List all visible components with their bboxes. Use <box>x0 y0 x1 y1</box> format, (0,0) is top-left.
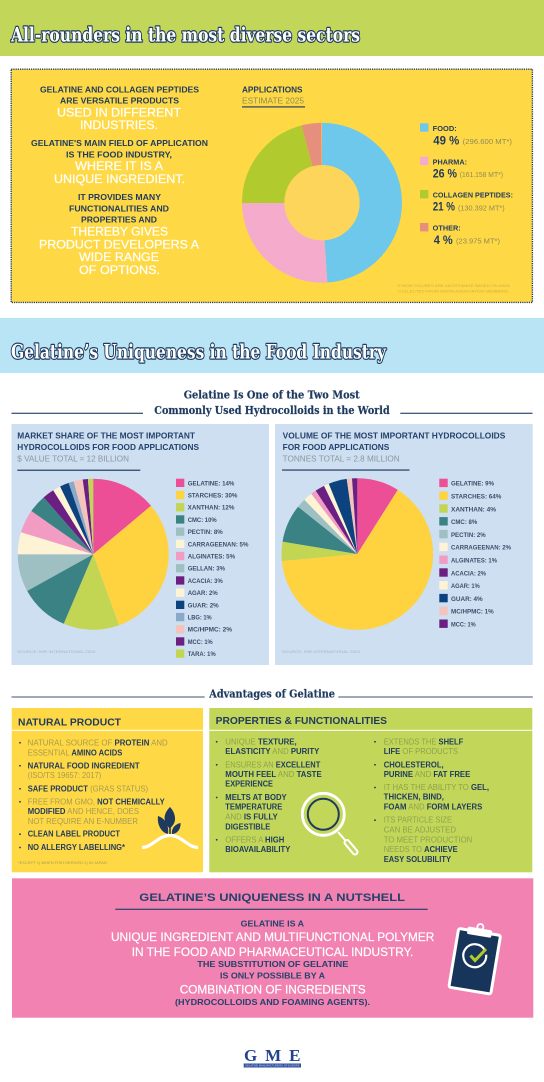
text block: intro copy: THEREBY GIVES <box>71 224 168 238</box>
list: natural product: FREE FROM GMO, NOT CHEMICALLY <box>28 797 165 806</box>
text block: intro copy <box>31 84 208 277</box>
legend: volume: CMC: 8% <box>451 519 478 526</box>
heading: market share <box>17 431 200 471</box>
legend: volume: ALGINATES: 1% <box>451 558 497 564</box>
text block: nutshell copy: (HYDROCOLLOIDS AND FOAMING AGENTS). <box>175 998 370 1007</box>
title: uniqueness: Gelatine’s Uniqueness in the Food Industry <box>11 340 387 364</box>
heading: market share: HYDROCOLLOIDS FOR FOOD APPLICATIONS <box>17 443 200 452</box>
text block: intro copy: ARE VERSATILE PRODUCTS <box>60 96 179 106</box>
list: properties left: TEMPERATURE <box>225 803 282 812</box>
list: properties right: FOAM AND FORM LAYERS <box>384 803 482 812</box>
header band: uniqueness <box>0 318 544 373</box>
legend: volume: MCC: 1% <box>451 622 476 628</box>
legend: volume: PECTIN: 2% <box>451 532 486 539</box>
list: properties left: ENSURES AN EXCELLENT <box>225 760 321 769</box>
legend: market share: CARRAGEENAN: 5% <box>188 541 249 548</box>
footnote: estimate <box>397 284 511 293</box>
panel: market share <box>12 424 269 665</box>
text block: nutshell copy: GELATINE IS A <box>241 919 304 928</box>
list: properties right: EASY SOLUBILITY <box>384 855 452 864</box>
source: volume: SOURCE: IMR INTERNATIONAL 2024 <box>282 650 360 654</box>
panel: natural product <box>12 708 203 872</box>
heading: volume <box>282 431 506 471</box>
list: natural product: MODIFIED AND HENCE, DOES <box>28 807 139 816</box>
footnote: estimate: COLLECTED FROM GROW ASSOCIATION MEMBERS. <box>398 289 509 293</box>
legend: market share: XANTHAN: 12% <box>188 505 235 512</box>
legend: applications: COLLAGEN PEPTIDES: <box>433 190 513 199</box>
heading: hydrocolloids <box>12 389 532 417</box>
legend: applications <box>420 123 513 247</box>
list: properties right: ITS PARTICLE SIZE <box>384 816 452 825</box>
legend: market share: ALGINATES: 5% <box>188 554 235 560</box>
list: properties right: IT HAS THE ABILITY TO GEL, <box>384 783 489 792</box>
heading: hydrocolloids: Gelatine Is One of the Two Most <box>184 389 361 402</box>
pie chart: market share <box>18 479 169 630</box>
heading: hydrocolloids: Commonly Used Hydrocolloids in the World <box>154 404 390 417</box>
legend: market share: PECTIN: 8% <box>188 529 223 536</box>
footnote: allergy: *EXCEPT 1) WHEN FISH DERIVED 2) IN JAPAN <box>18 861 107 865</box>
legend: applications: 21 % <box>433 200 455 214</box>
text block: nutshell copy <box>111 919 434 1007</box>
logo: GME: GELATINE MANUFACTURERS OF EUROPE <box>245 1064 300 1068</box>
list: natural product: NATURAL FOOD INGREDIENT <box>28 761 140 770</box>
text block: intro copy: IT PROVIDES MANY <box>78 192 161 202</box>
list: properties right: EXTENDS THE SHELF <box>384 737 464 746</box>
list: properties left: EXPERIENCE <box>225 780 273 789</box>
list: properties left: UNIQUE TEXTURE, <box>225 737 297 746</box>
panel: uniqueness in a nutshell <box>12 878 533 1018</box>
icon: magnifying glass <box>302 793 355 852</box>
text block: intro copy: GELATINE AND COLLAGEN PEPTIDES <box>40 84 199 94</box>
list: properties right: TO MEET PRODUCTION <box>384 835 472 844</box>
heading: properties: PROPERTIES & FUNCTIONALITIES <box>216 716 387 727</box>
list: properties left: ELASTICITY AND PURITY <box>225 747 320 756</box>
list: properties right: CAN BE ADJUSTED <box>384 826 456 835</box>
legend: applications: 26 % <box>433 166 457 180</box>
list: natural product: ESSENTIAL AMINO ACIDS <box>28 748 122 757</box>
legend: volume <box>439 479 511 628</box>
pie chart: volume <box>282 478 433 630</box>
list: natural product: NOT REQUIRE AN E-NUMBER <box>28 817 138 826</box>
legend: applications: PHARMA: <box>433 157 467 166</box>
list: natural product <box>19 738 168 852</box>
text block: intro copy: USED IN DIFFERENT <box>57 105 181 119</box>
text block: nutshell copy: COMBINATION OF INGREDIENTS <box>180 982 366 996</box>
list: natural product: NO ALLERGY LABELLING* <box>28 843 126 852</box>
text block: nutshell copy: IN THE FOOD AND PHARMACEUTICAL INDUSTRY. <box>132 945 413 959</box>
legend: market share: LBG: 1% <box>188 614 212 622</box>
legend: volume: STARCHES: 64% <box>451 494 502 500</box>
source: market share: SOURCE: IMR INTERNATIONAL 2024 <box>17 650 95 654</box>
list: properties left: AND IS FULLY <box>225 812 278 821</box>
panel: volume <box>275 424 533 665</box>
icon: clipboard with check <box>449 921 502 994</box>
text block: intro copy: UNIQUE INGREDIENT. <box>54 172 185 186</box>
text block: intro copy: PRODUCT DEVELOPERS A <box>39 237 200 251</box>
list: natural product: NATURAL SOURCE OF PROTEIN AND <box>28 738 168 747</box>
heading: advantages of gelatine: Advantages of Gelatine <box>208 687 335 700</box>
legend: applications: (23.975 MT*) <box>456 239 500 246</box>
text block: intro copy: FUNCTIONALITIES AND <box>69 203 169 213</box>
legend: applications: (161.158 MT*) <box>460 172 503 179</box>
list: properties right: NEEDS TO ACHIEVE <box>384 845 458 854</box>
text block: intro copy: INDUSTRIES. <box>80 118 158 132</box>
text block: intro copy: WHERE IT IS A <box>75 159 164 173</box>
heading: volume: TONNES TOTAL = 2.8 MILLION <box>283 454 400 463</box>
text block: nutshell copy: UNIQUE INGREDIENT AND MULTIFUNCTIONAL POLYMER <box>111 930 434 944</box>
legend: volume: ACACIA: 2% <box>451 570 486 577</box>
header band: all-rounders <box>0 0 544 56</box>
list: natural product: SAFE PRODUCT (GRAS STATUS) <box>28 784 148 793</box>
panel: properties and functionalities <box>209 708 532 872</box>
legend: volume: CARRAGEENAN: 2% <box>451 545 511 552</box>
legend: applications: (296.600 MT*) <box>463 139 512 146</box>
list: properties left: MELTS AT BODY <box>225 793 287 802</box>
text block: intro copy: PROPERTIES AND <box>81 215 157 225</box>
heading: volume: VOLUME OF THE MOST IMPORTANT HYDROCOLLOIDS <box>283 431 506 440</box>
heading: applications estimate: ESTIMATE 2025 <box>242 96 305 105</box>
legend: market share: STARCHES: 30% <box>188 492 238 500</box>
text block: intro copy: WIDE RANGE <box>79 250 159 264</box>
list: properties right: PURINE AND FAT FREE <box>384 770 470 779</box>
legend: applications: OTHER: <box>433 223 461 232</box>
list: properties right <box>374 737 489 864</box>
legend: applications: (130.392 MT*) <box>458 205 505 212</box>
list: properties left: MOUTH FEEL AND TASTE <box>225 770 322 779</box>
donut chart: applications <box>263 144 381 262</box>
list: properties left <box>216 737 322 854</box>
legend: volume: GELATINE: 9% <box>451 481 494 488</box>
legend: volume: GUAR: 4% <box>451 596 483 603</box>
heading: market share: $ VALUE TOTAL = 12 BILLION <box>17 454 129 463</box>
list: properties left: OFFERS A HIGH <box>225 835 285 844</box>
text block: nutshell copy: IS ONLY POSSIBLE BY A <box>220 971 325 980</box>
list: properties right: CHOLESTEROL, <box>384 760 444 769</box>
list: natural product: CLEAN LABEL PRODUCT <box>28 830 120 839</box>
text block: nutshell copy: THE SUBSTITUTION OF GELATINE <box>197 960 349 969</box>
footnote: estimate: *THESE FIGURES ARE AN ESTIMATE BASED ON DATA <box>397 284 511 288</box>
heading: applications estimate <box>242 84 305 108</box>
legend: applications: 49 % <box>433 133 460 147</box>
heading: natural product: NATURAL PRODUCT <box>18 717 121 728</box>
text block: intro copy: GELATINE'S MAIN FIELD OF APPLICATION <box>31 138 208 148</box>
legend: market share: TARA: 1% <box>188 651 216 658</box>
list: properties left: BIOAVAILABILITY <box>225 845 291 854</box>
list: properties right: LIFE OF PRODUCTS <box>384 747 458 756</box>
heading: volume: FOR FOOD APPLICATIONS <box>283 443 390 452</box>
legend: volume: XANTHAN: 4% <box>451 506 497 513</box>
legend: market share: MCC: 1% <box>188 639 213 646</box>
logo: GME: GME <box>244 1046 300 1065</box>
panel: applications <box>11 69 532 302</box>
legend: market share: ACACIA: 3% <box>188 578 223 585</box>
list: natural product: (ISO/TS 19657: 2017) <box>28 771 102 780</box>
text block: intro copy: IS THE FOOD INDUSTRY, <box>66 149 172 159</box>
legend: market share: MC/HPMC: 2% <box>188 627 233 634</box>
list: properties left: DIGESTIBLE <box>225 822 270 831</box>
legend: applications: FOOD: <box>433 124 457 133</box>
legend: applications: 4 % <box>434 233 453 247</box>
legend: volume: AGAR: 1% <box>451 583 480 590</box>
heading: nutshell: GELATINE’S UNIQUENESS IN A NUTSHELL <box>139 892 405 904</box>
title: all-rounders: All-rounders in the most diverse sectors <box>10 22 360 46</box>
legend: market share: GELATINE: 14% <box>188 480 235 487</box>
text block: intro copy: OF OPTIONS. <box>79 263 160 277</box>
heading: market share: MARKET SHARE OF THE MOST IMPORTANT <box>17 431 195 440</box>
icon: plant on hill <box>142 807 198 848</box>
legend: market share: GELLAN: 3% <box>188 566 225 573</box>
legend: market share <box>176 479 249 658</box>
heading: applications estimate: APPLICATIONS <box>242 84 303 94</box>
legend: volume: MC/HPMC: 1% <box>451 609 494 616</box>
list: properties right: THICKEN, BIND, <box>384 793 444 802</box>
legend: market share: CMC: 10% <box>188 517 217 524</box>
legend: market share: GUAR: 2% <box>188 602 219 609</box>
legend: market share: AGAR: 2% <box>188 590 218 597</box>
